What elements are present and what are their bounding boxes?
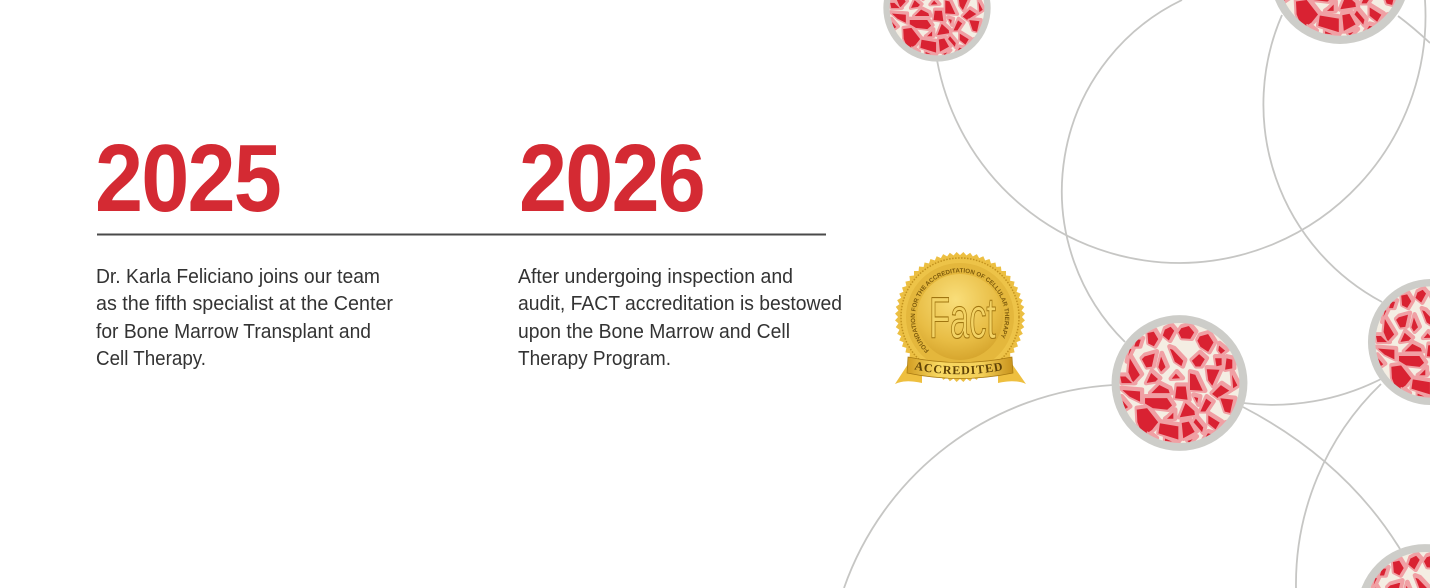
text block: 2026 milestone: After undergoing inspection and xyxy=(518,266,793,288)
seal starburst edge xyxy=(895,252,1025,382)
marrow node: top right xyxy=(1274,0,1406,40)
seal ring lettering: FOUNDATION FOR THE ACCREDITATION OF CELLULAR THERAPY xyxy=(910,268,1010,353)
marrow node: center xyxy=(1116,319,1243,447)
timeline rule xyxy=(97,234,826,236)
text block: 2025 milestone: Dr. Karla Feliciano joins our team xyxy=(96,266,380,288)
text block: 2025 milestone xyxy=(96,266,393,370)
text block: 2026 milestone xyxy=(518,266,842,370)
text block: 2026 milestone: audit, FACT accreditation is bestowed xyxy=(518,293,842,315)
text block: 2025 milestone: for Bone Marrow Transplant and xyxy=(96,321,371,343)
ribbon band xyxy=(907,357,1013,378)
marrow node: bottom right xyxy=(1361,548,1430,588)
network connector arcs xyxy=(844,0,1430,588)
icon: FACT accredited gold seal xyxy=(895,252,1026,384)
marrow node: right xyxy=(1372,283,1430,401)
text block: 2026 milestone: Therapy Program. xyxy=(518,348,671,370)
text block: 2026 milestone: upon the Bone Marrow and Cell xyxy=(518,321,790,343)
year heading: 2025: 2025 xyxy=(95,125,280,232)
text block: 2025 milestone: as the fifth specialist at the Center xyxy=(96,293,393,315)
ribbon label: ACCREDITED xyxy=(914,362,1002,374)
text block: 2025 milestone: Cell Therapy. xyxy=(96,348,206,370)
year heading: 2026: 2026 xyxy=(519,125,704,232)
ribbon tails xyxy=(895,361,922,384)
marrow node: top left xyxy=(887,0,987,58)
seal Fact logo: Fact xyxy=(929,286,996,351)
